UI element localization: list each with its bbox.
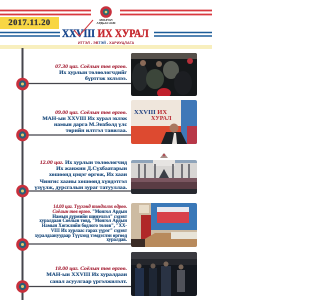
text: 09.00: төрийн илтгэл тавилаа. [66, 128, 127, 134]
photo: registration [131, 53, 197, 96]
photo: speaker [131, 100, 197, 144]
text: 09.00: МАН-ын XXVIII Их хурал эхлэж [42, 116, 127, 122]
text: 12.00 [34, 160, 127, 191]
node 4 [16, 238, 29, 251]
text: 14.00 [34, 204, 128, 243]
text: 12.00: хөшөөнд цэцэг өргөж, Их хаан [49, 172, 127, 178]
text: 07.30: бүртгэж эхлэлээ. [85, 76, 127, 82]
text: 12.00: 12.00 цаг. Их хурлын төлөөлөгчид [40, 160, 127, 166]
text: 12.00: Их жанжин Д.Сүхбаатарын [56, 166, 127, 172]
text: 14.00: 14.00 цаг. Түүхэнд тэмдэглэх өдрөө. [53, 205, 127, 210]
text: 14.00: Намын дүрмийн шинэчлэл" сэдэвт [52, 214, 127, 220]
text: 07.30: Их хурлын төлөөлөгчдийг [59, 70, 127, 76]
node 3 [16, 185, 29, 197]
text: 09.00: намын дарга М.Энхболд үлс [54, 122, 127, 128]
emblem above palace photo [160, 153, 168, 158]
node 2 [16, 129, 29, 141]
slogan: ИТГЭЛ - ЭВТЭЙ - ХАРИУЦЛАГА [78, 40, 134, 44]
node 1 [16, 78, 29, 90]
photo: speaker: ХУРАЛ [151, 116, 172, 122]
text: 18.00: 18.00 цаг. Соёлын төв өргөө. [55, 266, 127, 272]
red check swoosh [74, 20, 94, 37]
header stripes [0, 10, 212, 37]
congress title: XXVIII ИХ ХУРАЛ [62, 26, 149, 40]
text: 14.00: хуралдаан Соёлын төвд, "Монгол Ардын [39, 219, 127, 224]
photo: speaker: XXVIII ИХ [134, 109, 167, 116]
text: 07.30 [55, 64, 127, 82]
yellow strip [0, 45, 212, 48]
text: 07.30: 07.30 цаг. Соёлын төв өргөө. [55, 64, 127, 70]
date badge: 2017.11.20 [8, 18, 51, 27]
party name [96, 18, 116, 25]
date badge [0, 17, 59, 29]
text: 18.00: санал асуулгаар үргэлжилэлт. [50, 279, 127, 285]
text: 09.00 [42, 110, 128, 134]
header band [0, 6, 212, 49]
text: 09.00: 09.00 цаг. Соёлын төв өргөө. [55, 110, 127, 116]
text: 14.00: VIII Их хурлаас гарах үүрэг" сэдэвт [51, 229, 127, 234]
party name: МОНГОЛ [99, 18, 113, 22]
photo: government palace [131, 160, 197, 194]
text: 14.00: Намын Хөгжлийн бодлого төлөв", "XX- [42, 224, 127, 229]
party name: АРДЫН НАМ [97, 21, 115, 25]
emblem [100, 6, 112, 18]
photo: hall [131, 203, 197, 247]
timeline [16, 48, 131, 300]
text: 12.00: Чингис хааны хөшөөнд хүндэтгэл [40, 179, 127, 185]
text: 14.00: Соёлын төв өргөө. "Монгол Ардын [52, 210, 127, 215]
text: 18.00 [46, 266, 127, 285]
text: 14.00: хуралдаануудаар Түүхэнд тэмдэглэн өргөөд [35, 234, 127, 238]
text: 14.00: хуралдав. [106, 238, 127, 243]
text: 12.00: үзүүлж, дурсгалын зураг татууллаа. [34, 185, 127, 191]
photo: delegates [131, 252, 197, 296]
text: 18.00: МАН-ын XXVIII Их хуралдаан [46, 272, 127, 278]
node 5 [16, 280, 29, 293]
